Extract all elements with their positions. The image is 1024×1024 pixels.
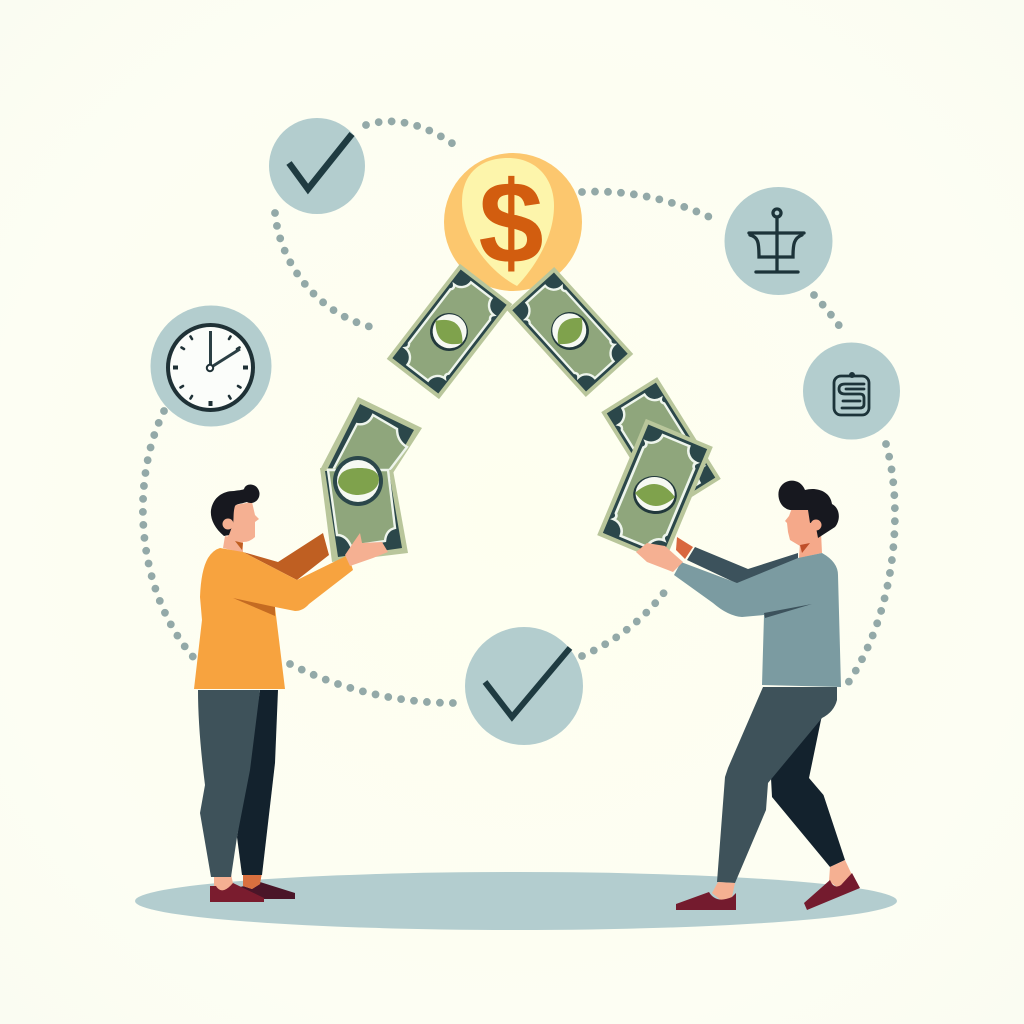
person left: [194, 484, 388, 902]
front leg right person: [717, 687, 837, 883]
back leg right person: [771, 715, 845, 867]
hand left person: [345, 533, 388, 566]
shirt right person: [674, 553, 841, 687]
icon: dollar coin: [444, 153, 582, 291]
banknote: left folded: [320, 397, 422, 562]
legs left person: [198, 690, 278, 877]
icon: clipboard badge: [803, 342, 900, 440]
head left person: [211, 484, 260, 550]
icon: dollar coin: $: [478, 157, 544, 288]
ground ellipse: [135, 872, 897, 930]
shirt left person: [194, 548, 353, 689]
dotted connector paths: [143, 121, 895, 703]
back ankle tint left person: [243, 872, 262, 889]
icon: balance scale badge: [724, 187, 832, 295]
hand right person: [636, 543, 683, 572]
back arm left person: [243, 533, 329, 580]
icon: check badge top: [269, 118, 365, 214]
neck left person: [223, 536, 243, 553]
person right: [636, 481, 860, 910]
front shoe left person: [210, 883, 264, 902]
banknote: top left: [387, 264, 512, 399]
neck right person: [799, 532, 822, 558]
back arm right person: [676, 537, 798, 584]
head right person: [778, 481, 839, 553]
ankles left person: [214, 872, 262, 896]
shoes right person: [676, 873, 860, 910]
back shoe left person: [240, 882, 295, 899]
banknote: top right: [507, 267, 633, 397]
icon: clock badge: [150, 306, 272, 426]
underarm shadow left person: [233, 598, 275, 616]
underarm shadow right person: [764, 604, 812, 618]
banknote: right front: [597, 419, 713, 563]
icon: check badge bottom: [465, 627, 583, 745]
ankles right person: [712, 860, 852, 901]
banknote: right back: [601, 377, 721, 514]
